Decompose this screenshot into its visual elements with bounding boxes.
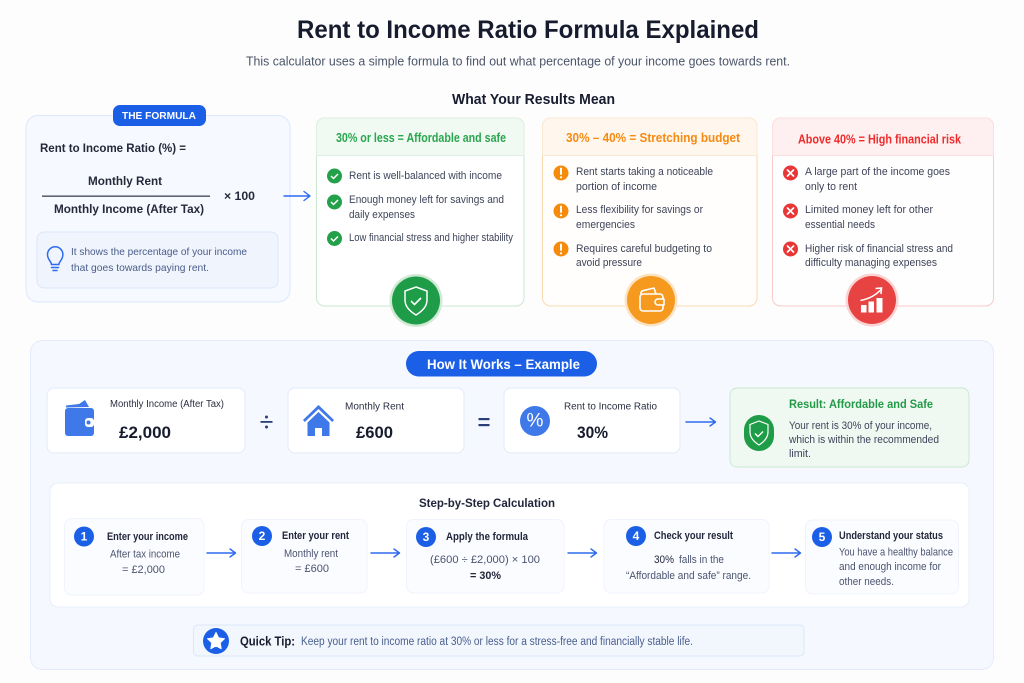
arrow: step 1 to 2 — [207, 549, 236, 557]
arrow: step 4 to 5 — [772, 549, 800, 557]
formula explanation callout — [37, 232, 278, 288]
list item: Rent starts taking a noticeable — [576, 166, 713, 178]
icon: result shield — [744, 415, 774, 451]
list item — [554, 166, 713, 193]
step 1 — [64, 518, 204, 595]
card: monthly rent — [288, 388, 464, 453]
list item: difficulty managing expenses — [805, 257, 937, 269]
list item: Higher risk of financial stress and — [805, 243, 953, 255]
formula explanation callout: It shows the percentage of your income — [71, 246, 247, 258]
panel: the formula — [26, 105, 290, 302]
icon: star — [203, 628, 229, 654]
list item: Less flexibility for savings or — [576, 204, 703, 216]
step 1: Enter your income — [107, 531, 188, 543]
formula fraction: Monthly Income (After Tax) — [54, 202, 204, 216]
list item: Limited money left for other — [805, 204, 933, 216]
formula fraction: × 100 — [224, 189, 255, 203]
how it works pill heading: How It Works – Example — [427, 356, 580, 372]
panel: how it works example — [30, 340, 994, 670]
step 4 — [604, 520, 769, 593]
list item: avoid pressure — [576, 257, 642, 269]
card: result: Your rent is 30% of your income, — [789, 420, 932, 432]
card: monthly income: Monthly Income (After Tax) — [110, 399, 224, 410]
list item: portion of income — [576, 181, 657, 193]
icon: light bulb — [48, 247, 63, 270]
list item: Rent is well-balanced with income — [349, 170, 502, 182]
list item — [554, 204, 703, 231]
list item: emergencies — [576, 219, 635, 231]
formula badge — [113, 105, 206, 126]
formula explanation callout: that goes towards paying rent. — [71, 262, 209, 274]
card: ratio: 30% — [577, 424, 608, 442]
list item — [327, 168, 502, 184]
list item — [554, 242, 712, 269]
icon: house — [303, 405, 334, 436]
green card header — [316, 118, 524, 156]
step 2: Enter your rent — [282, 530, 349, 542]
card: monthly income — [47, 388, 245, 453]
card: result: which is within the recommended — [788, 434, 939, 446]
list item: Low financial stress and higher stability — [349, 232, 513, 244]
step 3: = 30% — [470, 570, 501, 582]
orange card header — [542, 118, 757, 156]
icon: green shield — [390, 274, 442, 327]
icon: red rising chart — [846, 274, 898, 326]
icon: percent — [520, 406, 550, 436]
arrow: ratio to result — [686, 418, 716, 426]
step 5 — [806, 520, 958, 594]
subtitle: This calculator uses a simple formula to find out what percentage of your income goes towards rent. — [246, 54, 790, 68]
step 3: (£600 ÷ £2,000) × 100 — [430, 554, 540, 566]
step 2: 2 — [259, 529, 266, 543]
step 4: 30% — [654, 554, 674, 566]
step heading: Step-by-Step Calculation — [419, 496, 555, 510]
step 5: Understand your status — [839, 530, 943, 542]
list item: A large part of the income goes — [805, 166, 950, 178]
arrow: step 3 to 4 — [568, 549, 596, 557]
step 5: and enough income for — [839, 561, 941, 573]
step 1: 1 — [81, 530, 88, 544]
list item — [783, 166, 950, 193]
list item — [783, 242, 953, 269]
step 5: other needs. — [839, 576, 894, 588]
step 2 — [242, 520, 367, 593]
step 1: = £2,000 — [122, 564, 165, 576]
orange card header: 30% – 40% = Stretching budget — [566, 131, 741, 145]
quick tip: Quick Tip: — [240, 634, 295, 648]
card: monthly income: £2,000 — [119, 424, 171, 442]
card: result — [730, 388, 969, 467]
red card header: Above 40% = High financial risk — [798, 132, 961, 146]
step 4: falls in the — [679, 554, 724, 566]
card: result: Result: Affordable and Safe — [789, 397, 933, 411]
card: ratio: Rent to Income Ratio — [564, 402, 657, 412]
section heading: what your results mean: What Your Results Mean — [452, 92, 615, 108]
arrow: step 2 to 3 — [371, 549, 400, 557]
arrow: formula to results — [284, 192, 310, 200]
green card header: 30% or less = Affordable and safe — [336, 131, 506, 145]
formula badge: THE FORMULA — [122, 110, 196, 122]
equals sign — [478, 418, 490, 426]
step 4: “Affordable and safe” range. — [626, 570, 751, 582]
card: ratio — [504, 388, 680, 453]
icon: orange wallet — [624, 274, 678, 326]
list item — [327, 194, 504, 221]
card: monthly rent: £600 — [356, 424, 393, 442]
icon: blue wallet — [65, 400, 94, 436]
card: monthly rent: Monthly Rent — [345, 402, 404, 412]
step 3: 3 — [423, 530, 430, 544]
quick tip: Keep your rent to income ratio at 30% or less for a stress-free and financially stable life. — [301, 636, 693, 648]
quick tip — [194, 625, 804, 656]
step 5: You have a healthy balance — [839, 546, 953, 558]
list item: Requires careful budgeting to — [576, 243, 712, 255]
panel: affordable and safe — [316, 118, 524, 327]
step 3: Apply the formula — [446, 531, 529, 543]
card: result: limit. — [789, 448, 811, 460]
list item: only to rent — [805, 181, 857, 193]
formula fraction: Monthly Rent — [88, 174, 162, 188]
title: Rent to Income Ratio Formula Explained — [297, 16, 759, 44]
panel: stretching budget — [542, 118, 757, 326]
divide sign — [260, 416, 272, 428]
list item: Enough money left for savings and — [349, 194, 504, 206]
red card header — [772, 118, 994, 156]
step 2: Monthly rent — [284, 548, 338, 560]
step 3 — [406, 520, 564, 593]
list item: essential needs — [805, 219, 875, 231]
list item — [327, 231, 513, 246]
step 2: = £600 — [295, 563, 329, 575]
step 5: 5 — [819, 530, 826, 544]
formula label: Rent to Income Ratio (%) = — [40, 141, 186, 155]
formula fraction — [42, 174, 255, 216]
panel: high financial risk — [772, 118, 994, 326]
step 4: Check your result — [654, 530, 733, 542]
how it works pill heading — [406, 351, 597, 376]
panel: step by step calculation — [50, 483, 969, 607]
list item — [783, 204, 933, 231]
step 1: After tax income — [110, 548, 180, 560]
list item: daily expenses — [349, 209, 415, 221]
icon: percent: % — [527, 410, 544, 432]
step 4: 4 — [633, 529, 640, 543]
